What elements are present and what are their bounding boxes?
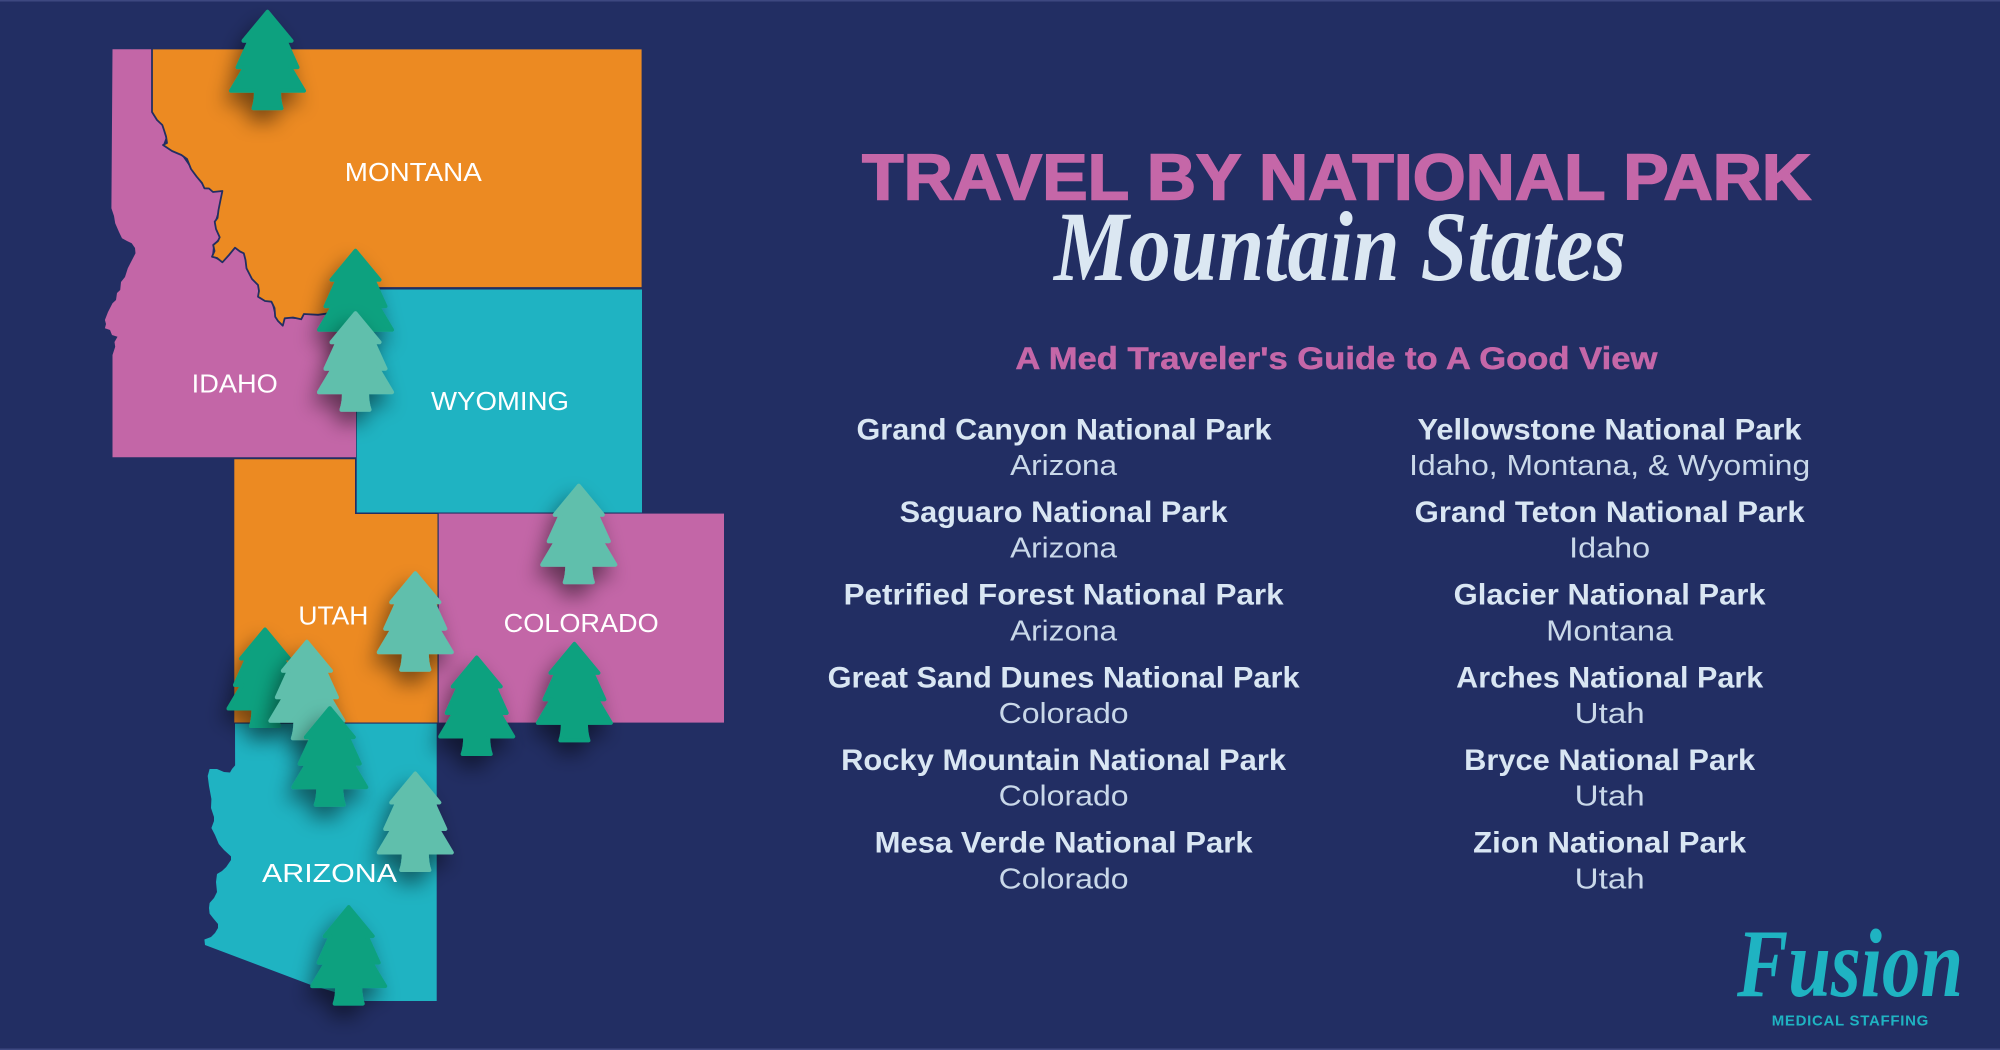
park: Petrified Forest: Petrified Forest National Park (844, 579, 1284, 612)
park: Petrified Forest: Arizona (1010, 615, 1118, 647)
park: Yellowstone: Yellowstone National Park (1418, 413, 1802, 446)
park: Mesa Verde: Colorado (999, 863, 1129, 895)
label: Colorado: COLORADO (504, 608, 659, 638)
park list: left column (828, 413, 1300, 895)
park: Bryce (1464, 744, 1756, 813)
state: Utah (234, 459, 438, 722)
park list: right column (1409, 413, 1810, 895)
park: Glacier: Glacier National Park (1454, 579, 1766, 612)
label: Idaho: IDAHO (192, 369, 278, 399)
logo tagline: MEDICAL STAFFING (1772, 1012, 1928, 1030)
park: Mesa Verde (875, 827, 1253, 895)
park: Great Sand Dunes (828, 661, 1300, 730)
title: TRAVEL BY NATIONAL PARK (862, 142, 1811, 214)
state: Colorado (439, 514, 724, 723)
park: Bryce: Bryce National Park (1464, 744, 1756, 777)
tree: Bryce (270, 642, 343, 738)
park: Rocky Mountain: Rocky Mountain National Park (841, 744, 1286, 777)
tagline: A Med Traveler's Guide to A Good View (1015, 340, 1658, 376)
tree: Mesa Verde (440, 658, 513, 754)
label: Wyoming: WYOMING (431, 386, 569, 416)
park: Zion (1473, 827, 1747, 895)
park: Rocky Mountain (841, 744, 1286, 813)
tree: Great Sand Dunes (538, 644, 611, 740)
park: Grand Teton: Grand Teton National Park (1415, 496, 1805, 529)
park: Bryce: Utah (1575, 781, 1645, 813)
state: Wyoming (357, 290, 642, 512)
label: Montana: MONTANA (345, 157, 482, 187)
tree: Arches (379, 573, 452, 670)
tree: Petrified Forest (379, 774, 452, 870)
park: Grand Canyon (856, 413, 1272, 482)
park: Arches: Arches National Park (1456, 661, 1764, 694)
state: Arizona (204, 724, 437, 1001)
park: Glacier (1454, 579, 1766, 647)
park: Yellowstone: Idaho, Montana, & Wyoming (1409, 450, 1810, 482)
park: Grand Canyon: Grand Canyon National Park (856, 413, 1272, 446)
tree: Yellowstone (319, 251, 392, 347)
park: Great Sand Dunes: Colorado (999, 698, 1129, 730)
park: Arches (1456, 661, 1764, 730)
park: Saguaro (900, 496, 1228, 565)
park: Grand Teton (1415, 496, 1805, 565)
park: Zion: Zion National Park (1473, 827, 1747, 860)
park: Grand Canyon: Arizona (1010, 450, 1118, 482)
tree: Saguaro (312, 907, 385, 1004)
map of the mountain states (105, 12, 724, 1004)
label: Arizona: ARIZONA (262, 858, 398, 888)
park: Arches: Utah (1575, 698, 1645, 730)
park: Rocky Mountain: Colorado (999, 781, 1129, 813)
tree: Glacier (231, 12, 304, 108)
park: Great Sand Dunes: Great Sand Dunes National Park (828, 661, 1300, 694)
park: Grand Teton: Idaho (1569, 533, 1650, 565)
park: Saguaro: Arizona (1010, 533, 1118, 565)
state: Montana (152, 48, 642, 326)
tree: Rocky Mountain (542, 486, 615, 582)
park: Zion: Utah (1575, 863, 1645, 895)
logo: Fusion Medical Staffing (1736, 910, 1963, 1030)
tree: Grand Canyon (293, 708, 366, 805)
park: Petrified Forest (844, 579, 1284, 647)
label: Utah: UTAH (298, 600, 368, 630)
state: Idaho (105, 49, 356, 457)
park: Glacier: Montana (1546, 615, 1674, 647)
tree: Zion (228, 630, 302, 726)
park: Yellowstone (1409, 413, 1810, 482)
park: Mesa Verde: Mesa Verde National Park (875, 827, 1253, 860)
tree: Grand Teton (319, 313, 392, 410)
park: Saguaro: Saguaro National Park (900, 496, 1228, 529)
script subtitle: Mountain States (1052, 191, 1626, 302)
